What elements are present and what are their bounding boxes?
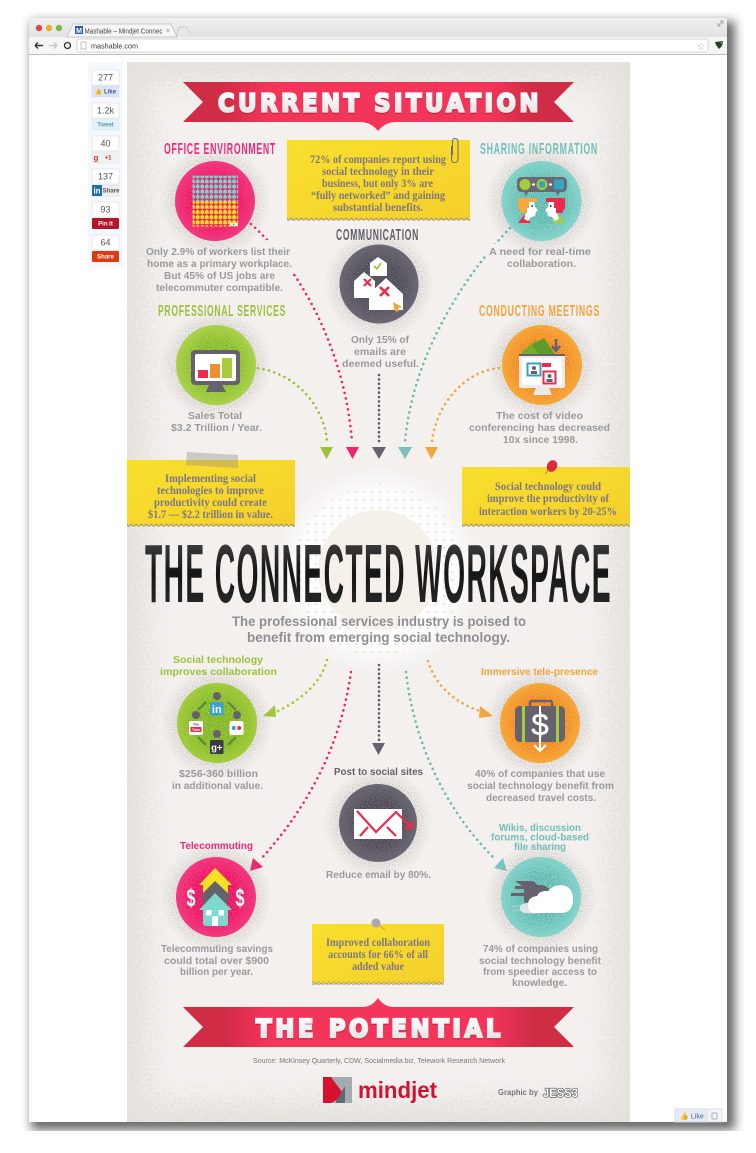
pinterest button (92, 202, 119, 229)
callout: improved collaboration: added value (352, 961, 404, 973)
pinterest button: Pin It (98, 222, 113, 228)
text: telecommuting savings: Telecommuting savings (161, 943, 273, 955)
heading: wikis, forums, file sharing: Wikis, discussion (499, 822, 581, 834)
text: travel costs: social technology benefit from (467, 780, 614, 792)
icon: paperclip (452, 138, 458, 162)
text: office stat: But 45% of US jobs are (164, 270, 275, 282)
text: travel costs (467, 768, 614, 804)
like button: 👍 Like (95, 88, 117, 96)
callout: 72% of companies: substantial benefits. (333, 202, 423, 214)
text: travel costs: 40% of companies that use (475, 768, 605, 780)
like button (92, 70, 119, 97)
icon: social network ring: Tube (192, 728, 200, 732)
icon: social network ring: g+ (211, 742, 223, 754)
icon: envelope with falling trend (323, 768, 433, 878)
icon: monitor bar chart (160, 309, 272, 421)
heading: professional services: PROFESSIONAL SERVICES (158, 303, 286, 320)
text: speedier access: from speedier access to (483, 966, 597, 978)
callout: 72% of companies: business, but only 3% are (322, 178, 433, 190)
central glow (274, 466, 482, 674)
text: meetings stat (469, 410, 610, 446)
tweet button: 1.2k (97, 106, 115, 116)
callout: improved collaboration (312, 918, 444, 985)
section: communication (324, 227, 434, 370)
dotted arrow: meetings to hub (425, 368, 499, 459)
callout: 72% of companies: 72% of companies report using (310, 154, 446, 166)
section: collaboration (160, 654, 277, 792)
tweet button (92, 103, 119, 130)
like button: 277 (98, 72, 113, 82)
heading: telecommuting: Telecommuting (180, 840, 253, 852)
section: social sites (323, 766, 433, 881)
dotted arrow: to telecommuting (250, 672, 351, 871)
pinterest button: 93 (100, 204, 111, 214)
text: speedier access (479, 943, 601, 989)
banner: current situation: CURRENT SITUATION (218, 90, 542, 118)
text: sales total (171, 410, 262, 434)
icon: grey pin (372, 918, 385, 930)
google plus button: 40 (100, 138, 111, 148)
tweet button: Tweet (97, 122, 114, 128)
callout: interaction workers: interaction workers by 20-25% (479, 506, 617, 518)
text: communication stat: emails are (354, 346, 406, 358)
banner: the potential: THE POTENTIAL (256, 1015, 504, 1044)
linkedin button (92, 169, 120, 196)
bottom right like widget (675, 1109, 722, 1122)
stumbleupon button: Share (97, 254, 114, 260)
text: sharing stat: A need for real-time (489, 246, 591, 258)
heading: post to social sites: Post to social sites (334, 766, 423, 778)
text: sales total: $3.2 Trillion / Year. (171, 422, 262, 434)
toolbar: ☆ (697, 42, 706, 52)
linkedin button: in (93, 186, 101, 196)
callout: productivity value (127, 452, 295, 527)
text: meetings stat: conferencing has decreased (469, 422, 610, 434)
text: sales total: Sales Total (188, 410, 242, 422)
text: telecommuting savings: billion per year. (180, 966, 253, 978)
text: sharing stat: collaboration. (507, 258, 576, 270)
text: office stat: telecommuter compatible. (156, 282, 283, 294)
section: cloud sharing (479, 822, 601, 989)
stumbleupon button: 64 (100, 238, 111, 248)
browser tab (67, 24, 191, 37)
callout: productivity value: $1.7 — $2.2 trillion in value. (148, 508, 273, 521)
stumbleupon button (92, 235, 119, 262)
text: communication stat: deemed useful. (342, 358, 419, 370)
icon: social network ring (161, 667, 273, 779)
text: meetings stat: The cost of video (496, 410, 583, 422)
heading: immersive tele-presence: Immersive tele-presence (481, 666, 598, 678)
toolbar (35, 21, 723, 52)
text: office stat: home as a primary workplace. (147, 258, 292, 270)
icon: clouds (485, 841, 597, 953)
text: speedier access: 74% of companies using (483, 943, 598, 955)
section: office environment (146, 141, 292, 294)
text gap backgrounds behind captions (266, 240, 512, 272)
credit: graphic by jess3: Graphic by (498, 1088, 539, 1097)
text: communication stat: Only 15% of (351, 334, 409, 346)
callout: improved collaboration: Improved collaboration (326, 937, 431, 949)
linkedin button: Share (103, 188, 120, 194)
banner: current situation (183, 82, 574, 131)
text: communication stat (342, 334, 419, 370)
callout: interaction workers: Social technology could (495, 481, 602, 493)
icon: red pin (545, 458, 559, 474)
subtitle: benefit from emerging social technology. (247, 630, 510, 645)
icon: video conference monitor (486, 309, 598, 421)
heading: wikis, forums, file sharing (491, 822, 589, 853)
icon: houses and dollars (160, 841, 272, 953)
text: office stat: Only 2.9% of workers list their (146, 246, 290, 258)
infographic panel background (127, 62, 630, 1122)
window buttons (36, 25, 62, 31)
section: sharing information (480, 141, 598, 270)
google plus button: +1 (105, 156, 112, 162)
dotted arrow: to collaboration (263, 660, 327, 717)
text: reduce email: Reduce email by 80%. (326, 869, 431, 881)
section: tele-presence (467, 666, 614, 804)
dotted arrow: to cloud (406, 672, 507, 871)
icon: suitcase with dollar (484, 667, 596, 779)
subtitle: The professional services industry is poised to (232, 614, 526, 629)
text: additional value (172, 768, 263, 792)
section: conducting meetings (469, 303, 610, 446)
icon: tape (186, 452, 238, 468)
credit: graphic by jess3 (498, 1086, 578, 1100)
callout: productivity value: productivity could create (154, 497, 267, 509)
source line: Source: McKinsey Quarterly, CDW, Socialmedia.biz, Telework Research Network (253, 1056, 505, 1065)
banner: the potential: THE POTENTIAL (256, 1014, 504, 1043)
icon: people grid (159, 145, 271, 257)
credit: graphic by jess3: JESS3 (543, 1086, 578, 1100)
callout: interaction workers: improve the productivity of (487, 493, 609, 505)
text: sharing stat (489, 246, 591, 270)
heading: conducting meetings: CONDUCTING MEETINGS (479, 303, 600, 320)
dotted arrow: professional to hub (258, 368, 333, 459)
browser tab: M (76, 28, 82, 35)
callout: 72% of companies: social technology in their (322, 166, 434, 178)
icon: social network ring: You (193, 722, 199, 726)
dotted arrow: to tele-presence (428, 661, 493, 718)
icon: houses and dollars: $ (186, 884, 196, 912)
heading: wikis, forums, file sharing: file sharing (514, 841, 566, 853)
logo: mindjet (323, 1077, 437, 1103)
icon: social network ring: in (212, 704, 222, 716)
bottom right like widget: 👍 Like (680, 1112, 704, 1120)
heading: social technology improves collaboration: improves collaboration (160, 666, 277, 678)
banner: current situation: CURRENT SITUATION (218, 88, 542, 118)
text: travel costs: decreased travel costs. (486, 792, 596, 804)
logo: mindjet: mindjet (358, 1077, 437, 1103)
dotted arrow: office to hub (251, 224, 359, 459)
icon: suitcase with dollar: $ (531, 707, 549, 742)
text: meetings stat: 10x since 1998. (503, 434, 578, 446)
toolbar: mashable.com (91, 42, 138, 50)
section: professional services (158, 303, 286, 434)
text: office stat (146, 246, 292, 294)
dotted arrow: to social sites (372, 665, 385, 755)
callout: interaction workers (462, 458, 630, 527)
text: speedier access: knowledge. (512, 977, 567, 989)
social share sidebar (88, 62, 123, 268)
text: additional value: $256-360 billion (179, 768, 258, 780)
callout: 72% of companies (287, 138, 470, 221)
callout: productivity value: Implementing social (165, 473, 256, 485)
linkedin button: 137 (98, 172, 113, 182)
heading: social technology improves collaboration (160, 654, 277, 678)
text: telecommuting savings: could total over $900 (164, 955, 269, 967)
text: additional value: in additional value. (172, 780, 263, 792)
browser tab: × (166, 28, 170, 35)
text: speedier access: social technology benefit (479, 955, 601, 967)
callout: 72% of companies: “fully networked” and gaining (311, 190, 445, 202)
heading: social technology improves collaboration: Social technology (173, 654, 263, 666)
dotted arrow: sharing to hub (398, 228, 510, 459)
section: telecommuting (160, 840, 273, 978)
subtitle (232, 614, 526, 645)
google plus button (92, 136, 119, 163)
banner: the potential (183, 998, 574, 1047)
text: telecommuting savings (161, 943, 273, 978)
browser tab: Mashable – Mindjet Connec (84, 28, 163, 36)
callout: productivity value: technologies to improve (157, 485, 264, 497)
google plus button: g (94, 154, 99, 162)
icon: houses and dollars: $ (236, 884, 245, 912)
heading: wikis, forums, file sharing: forums, cloud-based (491, 832, 589, 844)
heading: communication: COMMUNICATION (336, 227, 419, 244)
icon: envelopes (324, 229, 434, 339)
heading: office environment: OFFICE ENVIRONMENT (164, 141, 276, 158)
heading: sharing information: SHARING INFORMATION (480, 141, 598, 158)
dotted arrow: communication to hub (372, 375, 386, 459)
callout: improved collaboration: accounts for 66% of all (328, 949, 428, 961)
icon: two people talking (486, 145, 598, 257)
